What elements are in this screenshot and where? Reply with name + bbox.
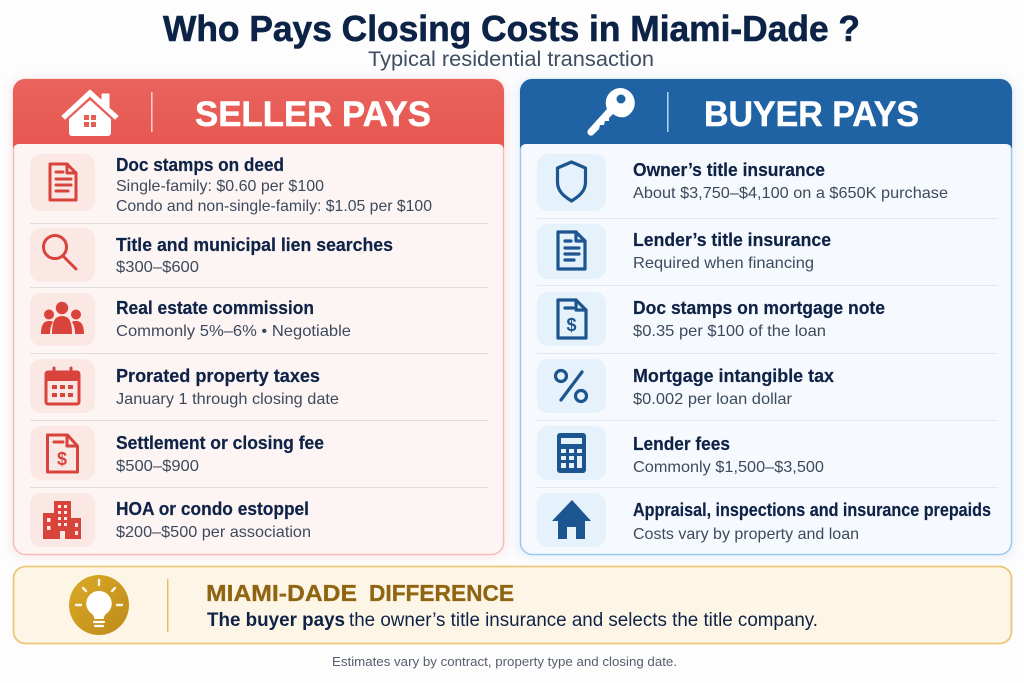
callout text: The buyer pays (207, 609, 345, 631)
subtitle: Typical residential transaction (368, 47, 654, 71)
seller row: title and lien searches (30, 228, 393, 282)
seller row: settlement or closing fee: $500–$900 (116, 458, 199, 475)
seller row: doc stamps on deed (30, 154, 432, 215)
title: Who Pays Closing Costs in Miami-Dade ? (163, 8, 860, 49)
buyer row: owner's title insurance: About $3,750–$4,100 on a $650K purchase (633, 185, 948, 202)
panel: seller pays (10, 78, 507, 558)
seller row: prorated property taxes: Prorated property taxes (116, 366, 320, 386)
buyer row: appraisal, inspections and insurance prepaids: Appraisal, inspections and insurance prepaids (633, 500, 991, 520)
seller row: title and lien searches: Title and municipal lien searches (116, 235, 393, 255)
seller row: doc stamps on deed: Condo and non-single-family: $1.05 per $100 (116, 198, 432, 215)
seller header band (13, 79, 504, 149)
buyer row: lender fees (537, 426, 824, 480)
buyer row: doc stamps on mortgage note: Doc stamps on mortgage note (633, 298, 885, 318)
seller row: hoa or condo estoppel (30, 493, 311, 547)
buyer row: lender fees: Lender fees (633, 434, 730, 454)
seller row: doc stamps on deed: Single-family: $0.60 per $100 (116, 178, 324, 195)
seller row: settlement or closing fee: $ (57, 449, 67, 469)
seller row: real estate commission: Commonly 5%–6% • Negotiable (116, 323, 351, 340)
seller row: doc stamps on deed: Doc stamps on deed (116, 155, 284, 175)
buyer row: doc stamps on mortgage note: $ (566, 315, 577, 335)
buyer heading: BUYER PAYS (704, 95, 919, 134)
callout heading: MIAMI-DADE (206, 580, 357, 606)
callout heading (206, 580, 514, 606)
buyer row: lender fees: Commonly $1,500–$3,500 (633, 459, 824, 476)
seller row: settlement or closing fee: Settlement or closing fee (116, 433, 324, 453)
seller row: hoa or condo estoppel: HOA or condo estoppel (116, 499, 309, 519)
seller row: settlement or closing fee (30, 426, 324, 480)
buyer row: lender's title insurance (537, 224, 831, 279)
callout text: the owner’s title insurance and selects the title company. (349, 609, 818, 631)
seller row: prorated property taxes (30, 359, 339, 413)
seller row: real estate commission (30, 293, 351, 346)
buyer row: doc stamps on mortgage note (537, 292, 885, 346)
buyer row: lender's title insurance: Lender’s title insurance (633, 230, 831, 250)
footnote: Estimates vary by contract, property type and closing date. (332, 654, 677, 669)
seller row: title and lien searches: $300–$600 (116, 259, 199, 276)
icon: house (62, 90, 118, 136)
buyer row: mortgage intangible tax (537, 359, 834, 413)
buyer header band (520, 79, 1012, 149)
seller row: hoa or condo estoppel: $200–$500 per association (116, 524, 311, 541)
buyer row: appraisal, inspections and insurance prepaids: Costs vary by property and loan (633, 526, 859, 543)
seller row: prorated property taxes: January 1 through closing date (116, 391, 339, 408)
icon: key (587, 88, 635, 136)
buyer row: mortgage intangible tax: Mortgage intangible tax (633, 366, 834, 386)
buyer row: owner's title insurance: Owner’s title insurance (633, 160, 825, 180)
icon: light bulb (69, 575, 129, 635)
panel: buyer pays (517, 78, 1015, 558)
buyer row: appraisal, inspections and insurance prepaids (537, 493, 991, 547)
callout: miami-dade difference (14, 566, 1012, 644)
buyer row: lender's title insurance: Required when financing (633, 255, 814, 272)
callout heading: DIFFERENCE (369, 580, 514, 606)
buyer row: doc stamps on mortgage note: $0.35 per $100 of the loan (633, 323, 826, 340)
seller row: real estate commission: Real estate commission (116, 298, 314, 318)
buyer row: owner's title insurance (537, 154, 948, 211)
buyer row: mortgage intangible tax: $0.002 per loan dollar (633, 391, 793, 408)
seller heading: SELLER PAYS (195, 95, 431, 134)
